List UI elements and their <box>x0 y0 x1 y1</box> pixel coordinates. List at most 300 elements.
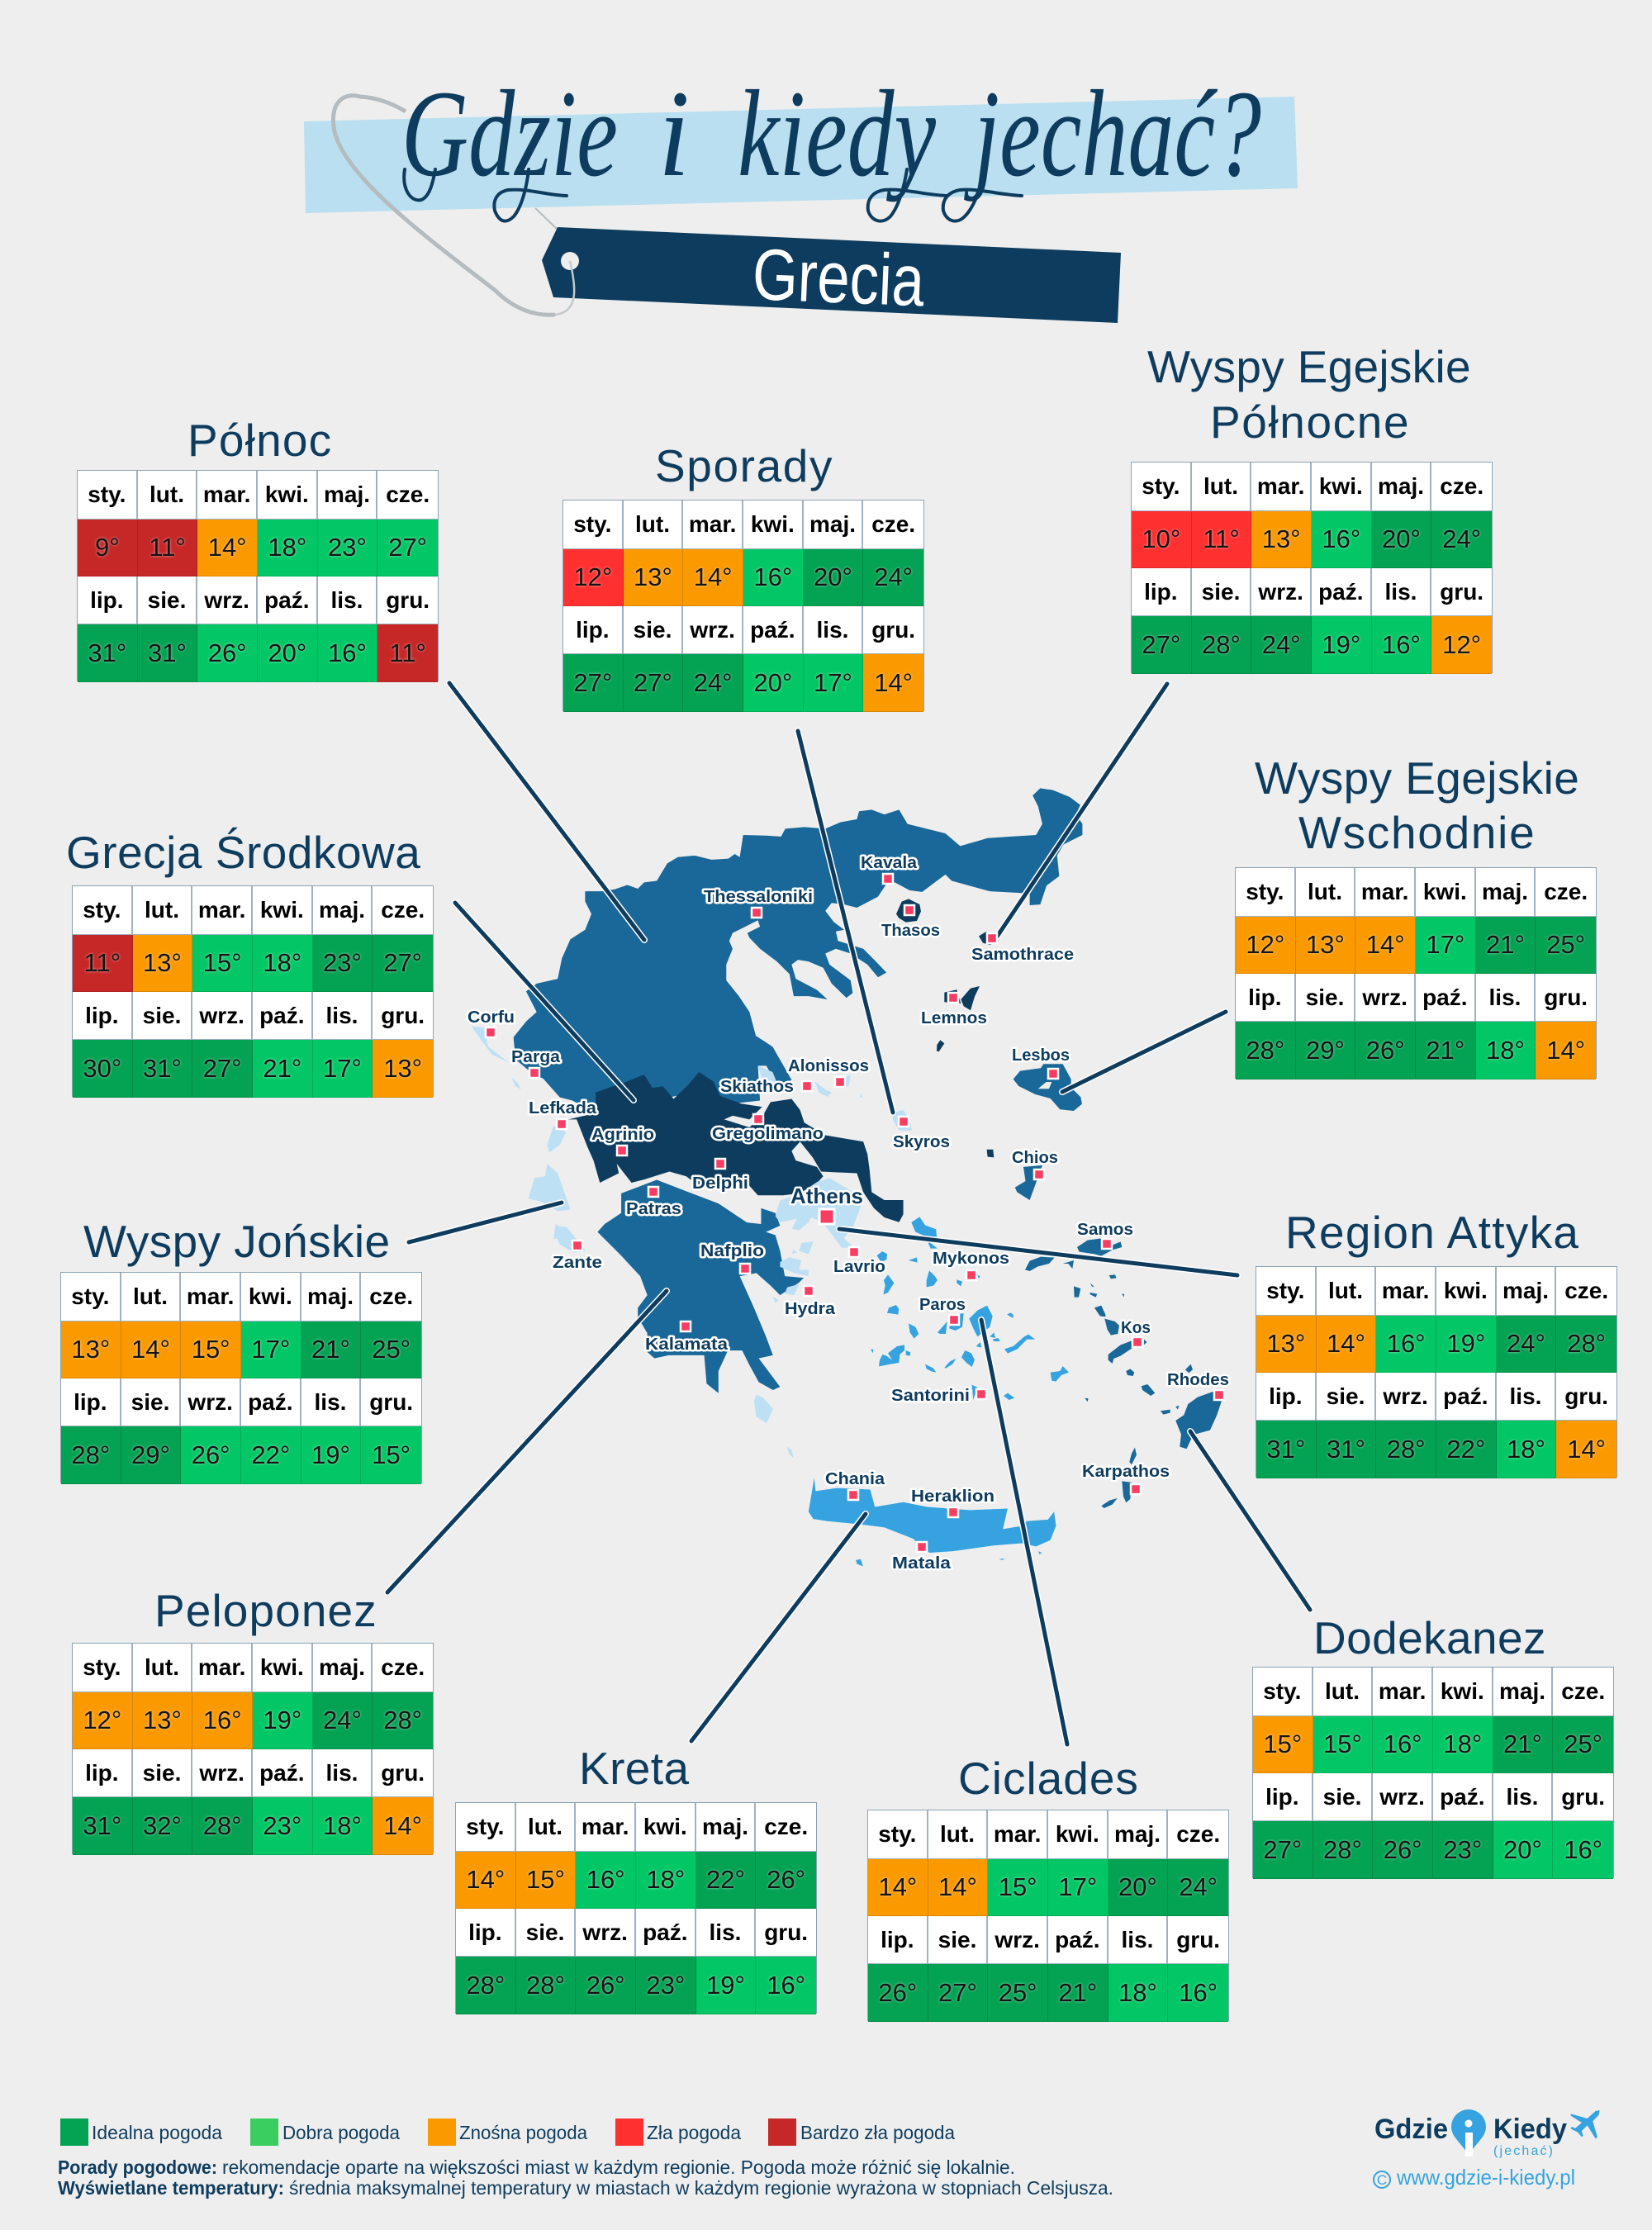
table: Wyspy Jońskie: 26° <box>192 1440 230 1468</box>
islands: Chios <box>1015 1165 1042 1200</box>
legend item: very bad weather <box>768 2118 955 2146</box>
table: Grecja Środkowa: 23° <box>323 948 362 977</box>
city: Gregolimano <box>712 1114 824 1143</box>
city: Chania <box>825 1470 885 1500</box>
title: Gdzie <box>401 65 618 202</box>
table: Region Attyka: lut. <box>1328 1278 1363 1303</box>
table: Ciclades: 18° <box>1118 1977 1157 2007</box>
islands: Dodecanese and Samos <box>1025 1238 1222 1508</box>
table: Region Attyka: maj. <box>1502 1278 1549 1303</box>
table: Grecja Środkowa: mar. <box>198 897 245 923</box>
panel: Wyspy Egejskie Wschodnie <box>1235 752 1597 1079</box>
table: Grecja Środkowa: 13° <box>383 1054 422 1082</box>
table: Wyspy Egejskie Wschodnie: lis. <box>1489 985 1521 1009</box>
map of Greece <box>472 788 1222 1566</box>
logo: Kiedy <box>1493 2114 1567 2145</box>
table: Peloponez: 32° <box>143 1810 182 1840</box>
city: Agrinio <box>591 1126 654 1155</box>
table: Sporady: 17° <box>814 667 852 697</box>
table: Wyspy Egejskie Północne: 24° <box>1262 629 1301 659</box>
city: Karpathos: Karpathos <box>1082 1463 1170 1481</box>
table: Wyspy Egejskie Wschodnie: sty. <box>1246 879 1284 904</box>
title <box>401 65 1261 202</box>
city: Samothrace: Samothrace <box>971 946 1074 964</box>
table: Wyspy Egejskie Północne: cze. <box>1440 473 1483 499</box>
city: Skyros: Skyros <box>893 1133 950 1151</box>
table: Peloponez: 14° <box>383 1810 422 1840</box>
table: Wyspy Egejskie Północne: paź. <box>1318 578 1364 605</box>
city: Delphi: Delphi <box>692 1174 748 1193</box>
heading: Wyspy Jońskie: Wyspy Jońskie <box>83 1216 390 1267</box>
table: Wyspy Jońskie: cze. <box>369 1283 413 1309</box>
city: Chios <box>1012 1149 1058 1179</box>
islands: Cyclades <box>871 1217 1069 1400</box>
legend item: bad weather: Zła pogoda <box>647 2122 741 2143</box>
table: Dodekanez: gru. <box>1561 1784 1605 1809</box>
table: Dodekanez: 21° <box>1503 1729 1542 1758</box>
table: Kreta: sie. <box>526 1919 564 1944</box>
table: Północ: lip. <box>90 586 124 613</box>
table: Grecja Środkowa <box>72 885 434 1097</box>
table: Wyspy Egejskie Północne: maj. <box>1378 473 1424 499</box>
table: Wyspy Egejskie Północne: 10° <box>1142 524 1180 553</box>
table: Ciclades: 16° <box>1179 1977 1218 2007</box>
table: Wyspy Egejskie Północne: wrz. <box>1258 578 1303 605</box>
table: Wyspy Egejskie Wschodnie: 14° <box>1366 930 1405 959</box>
table: Peloponez: sie. <box>143 1759 181 1786</box>
city: Kos <box>1121 1319 1151 1347</box>
icon: airplane <box>1571 2110 1600 2138</box>
panel: Dodekanez <box>1252 1612 1614 1879</box>
city: Heraklion <box>911 1487 995 1517</box>
table: Grecja Środkowa: 27° <box>383 948 422 977</box>
table: Północ: 18° <box>268 533 306 562</box>
table: Grecja Środkowa: 11° <box>84 948 121 977</box>
table: Peloponez: 16° <box>203 1706 242 1734</box>
table: Region Attyka: 13° <box>1266 1329 1305 1358</box>
table: Region Attyka: wrz. <box>1383 1383 1428 1409</box>
table: Ciclades: 17° <box>1058 1872 1097 1901</box>
legend item: bad weather <box>615 2118 741 2146</box>
city: Athens: Athens <box>790 1184 863 1208</box>
table: Kreta: maj. <box>702 1814 748 1839</box>
city: Patras <box>626 1187 681 1218</box>
table: Północ <box>77 470 439 681</box>
table: Peloponez: 28° <box>203 1810 242 1840</box>
table: Grecja Środkowa: paź. <box>259 1003 305 1027</box>
table: Ciclades: sty. <box>878 1821 916 1847</box>
table: Ciclades: 20° <box>1118 1872 1157 1901</box>
table: Wyspy Jońskie: paź. <box>248 1389 293 1414</box>
table: Wyspy Egejskie Wschodnie: kwi. <box>1423 879 1467 904</box>
table: Grecja Środkowa: wrz. <box>199 1003 244 1027</box>
city: Mykonos <box>933 1250 1009 1280</box>
table: Wyspy Egejskie Wschodnie: 14° <box>1546 1036 1585 1064</box>
legend item: ideal weather: Idealna pogoda <box>92 2122 222 2143</box>
table: Ciclades: 14° <box>878 1872 917 1901</box>
table: Grecja Środkowa: maj. <box>319 897 365 923</box>
city: Lesbos <box>1012 1046 1070 1079</box>
city: Nafplio <box>700 1242 764 1274</box>
logo <box>1374 2109 1600 2190</box>
table: Kreta: gru. <box>764 1919 808 1944</box>
table: Dodekanez: sty. <box>1263 1678 1301 1704</box>
table: Północ: lut. <box>150 482 184 507</box>
table: Północ: gru. <box>386 586 430 613</box>
table: Peloponez: kwi. <box>260 1654 304 1680</box>
table: Dodekanez: wrz. <box>1379 1784 1425 1809</box>
table: Kreta: kwi. <box>643 1814 687 1839</box>
heading: Sporady: Sporady <box>655 440 833 491</box>
heading line 1: Wyspy Egejskie <box>1147 341 1471 392</box>
heading: Region Attyka: Region Attyka <box>1285 1207 1579 1258</box>
table: Dodekanez: 15° <box>1323 1729 1362 1758</box>
table: Grecja Środkowa: lut. <box>145 897 179 923</box>
table: Grecja Środkowa: cze. <box>381 897 425 923</box>
table: Sporady: 27° <box>573 667 612 697</box>
table: Północ: 23° <box>328 533 367 562</box>
table: Peloponez: 24° <box>323 1706 362 1734</box>
heading line 2: Północne <box>1210 396 1410 448</box>
table: Peloponez: 31° <box>83 1810 121 1840</box>
city: Matala: Matala <box>892 1554 952 1573</box>
table: Północ: kwi. <box>265 482 309 507</box>
table: Wyspy Egejskie Północne: lut. <box>1203 473 1238 499</box>
table: Wyspy Jońskie: 21° <box>311 1335 350 1364</box>
table: Ciclades: lis. <box>1122 1926 1153 1952</box>
table: Północ: sie. <box>148 586 186 613</box>
table: Peloponez: 13° <box>143 1706 182 1734</box>
table: Wyspy Jońskie: mar. <box>187 1283 234 1309</box>
table: Peloponez: sty. <box>83 1654 121 1680</box>
city: Paros <box>919 1296 966 1325</box>
table: Wyspy Jońskie: lis. <box>315 1389 346 1414</box>
city: Kalamata: Kalamata <box>645 1336 729 1354</box>
table: Peloponez: paź. <box>259 1759 305 1786</box>
table: Kreta: 14° <box>466 1865 505 1894</box>
title banner <box>304 96 1298 323</box>
table: Wyspy Egejskie Północne: sie. <box>1202 578 1240 605</box>
city: Hydra <box>785 1286 836 1318</box>
city: Lemnos: Lemnos <box>921 1009 987 1027</box>
table: Ciclades: 26° <box>878 1977 917 2007</box>
city: Samos <box>1077 1221 1133 1249</box>
table: Wyspy Egejskie Północne: gru. <box>1440 578 1483 605</box>
table: Ciclades: 14° <box>938 1872 977 1901</box>
table: Wyspy Egejskie Wschodnie: 26° <box>1366 1036 1405 1064</box>
legend item: tolerable weather: Znośna pogoda <box>459 2122 587 2143</box>
city: Chios: Chios <box>1012 1149 1058 1167</box>
table: Wyspy Jońskie: 29° <box>131 1440 170 1468</box>
table: Kreta: 26° <box>767 1865 805 1894</box>
table: Kreta: 28° <box>466 1971 505 1999</box>
table: Peloponez: gru. <box>381 1759 425 1786</box>
table: Dodekanez: 16° <box>1564 1835 1602 1863</box>
table: Północ: 11° <box>149 533 186 562</box>
table: Peloponez: 18° <box>323 1810 362 1840</box>
table: Wyspy Egejskie Wschodnie: 21° <box>1486 930 1525 959</box>
table: Sporady: wrz. <box>690 616 735 643</box>
city: Zante: Zante <box>553 1254 602 1272</box>
table: Sporady: sty. <box>573 511 611 537</box>
table: Sporady: maj. <box>809 511 856 537</box>
table: Grecja Środkowa: 15° <box>203 948 242 977</box>
table: Północ: mar. <box>203 482 250 507</box>
panel: Wyspy Jońskie <box>60 1216 422 1484</box>
panel: Peloponez <box>72 1585 434 1855</box>
city: Thasos: Thasos <box>881 922 940 940</box>
table: Wyspy Jońskie: sty. <box>71 1283 109 1309</box>
table: Dodekanez: cze. <box>1561 1678 1605 1704</box>
website: www.gdzie-i-kiedy.pl <box>1396 2165 1575 2190</box>
table: Sporady: 20° <box>753 667 792 697</box>
table: Dodekanez: 16° <box>1384 1729 1422 1758</box>
table: Region Attyka: 31° <box>1327 1434 1365 1464</box>
logo: Gdzie <box>1374 2114 1448 2145</box>
table: Dodekanez: kwi. <box>1441 1678 1484 1704</box>
table: Grecja Środkowa: 18° <box>263 948 301 977</box>
table: Grecja Środkowa: gru. <box>381 1003 425 1027</box>
table: Dodekanez: 27° <box>1263 1835 1302 1863</box>
city: Agrinio: Agrinio <box>591 1126 654 1144</box>
website: C <box>1377 2172 1387 2188</box>
table: Wyspy Egejskie Wschodnie: 25° <box>1546 930 1585 959</box>
city: Thessaloniki <box>704 888 813 918</box>
city: Lavrio: Lavrio <box>833 1258 885 1276</box>
table: Region Attyka: 24° <box>1507 1329 1545 1358</box>
heading: Kreta: Kreta <box>579 1743 689 1794</box>
table: Kreta: sty. <box>466 1814 504 1839</box>
city labels <box>468 854 1229 1573</box>
table: Wyspy Jońskie: 15° <box>372 1440 411 1468</box>
table: Dodekanez: paź. <box>1440 1784 1485 1809</box>
table: Ciclades: sie. <box>938 1926 976 1952</box>
leader lines <box>387 683 1310 1744</box>
table: Ciclades: maj. <box>1114 1821 1161 1847</box>
city: Gregolimano: Gregolimano <box>712 1125 824 1143</box>
table: Dodekanez: lip. <box>1265 1784 1299 1809</box>
table: Ciclades: 24° <box>1179 1872 1218 1901</box>
table: Dodekanez: 28° <box>1323 1835 1362 1863</box>
table: Wyspy Egejskie Północne: kwi. <box>1319 473 1363 499</box>
table: Region Attyka: 14° <box>1327 1329 1365 1358</box>
table: Region Attyka: cze. <box>1564 1278 1608 1303</box>
table: Wyspy Jońskie: 19° <box>311 1440 350 1468</box>
table: Region Attyka: 22° <box>1446 1434 1485 1464</box>
subtitle: Grecia: Grecia <box>751 233 926 321</box>
table: Wyspy Egejskie Wschodnie: mar. <box>1361 879 1408 904</box>
city: Thessaloniki: Thessaloniki <box>704 888 813 906</box>
city: Lefkada: Lefkada <box>529 1099 597 1117</box>
legend item: good weather: Dobra pogoda <box>282 2122 400 2143</box>
table: Grecja Środkowa: sty. <box>83 897 121 923</box>
city: Samos: Samos <box>1077 1221 1133 1239</box>
table: Wyspy Egejskie Północne: mar. <box>1257 473 1304 499</box>
panel: Region Attyka <box>1256 1207 1617 1478</box>
region: Attica and Ionian islands <box>555 1179 861 1458</box>
table: Wyspy Egejskie Wschodnie: 29° <box>1306 1036 1345 1064</box>
table: Wyspy Egejskie Północne: 24° <box>1442 524 1481 553</box>
table: Północ: paź. <box>264 586 310 613</box>
table: Region Attyka: gru. <box>1564 1383 1608 1409</box>
logo: (jechać) <box>1493 2144 1553 2158</box>
table: Dodekanez: 25° <box>1564 1729 1602 1758</box>
city: Kavala <box>861 854 918 884</box>
table: Ciclades: 21° <box>1058 1977 1097 2007</box>
table: Wyspy Egejskie Północne <box>1131 462 1493 673</box>
table: Wyspy Jońskie: 22° <box>251 1440 290 1468</box>
table: Peloponez: lis. <box>326 1759 358 1786</box>
table: Wyspy Egejskie Wschodnie: wrz. <box>1362 985 1408 1009</box>
title: kiedy <box>738 65 936 202</box>
table: Północ: wrz. <box>204 586 249 613</box>
table: Dodekanez: lut. <box>1325 1678 1360 1704</box>
table: Północ: 16° <box>328 638 367 667</box>
table: Wyspy Egejskie Północne: 20° <box>1382 524 1421 553</box>
table: Wyspy Egejskie Wschodnie: 13° <box>1306 930 1345 959</box>
city: Karpathos <box>1082 1463 1170 1494</box>
table: Wyspy Egejskie Wschodnie: lip. <box>1248 985 1282 1009</box>
city: Kos: Kos <box>1121 1319 1151 1337</box>
heading line 2: Wschodnie <box>1298 807 1536 858</box>
table: Wyspy Egejskie Północne: 12° <box>1442 629 1481 659</box>
city: Parga <box>511 1048 561 1078</box>
table: Region Attyka: 18° <box>1507 1434 1545 1464</box>
table: Wyspy Jońskie: maj. <box>307 1283 354 1309</box>
table: Peloponez: cze. <box>381 1654 425 1680</box>
table: Region Attyka: 28° <box>1387 1434 1426 1464</box>
table: Peloponez: 23° <box>263 1810 301 1840</box>
table: Dodekanez: mar. <box>1379 1678 1426 1704</box>
table: Kreta: mar. <box>582 1814 629 1839</box>
table: Sporady: 16° <box>753 562 792 591</box>
city: Rhodes: Rhodes <box>1167 1371 1229 1389</box>
table: Wyspy Egejskie Północne: lip. <box>1144 578 1178 605</box>
table: Ciclades: gru. <box>1176 1926 1220 1952</box>
title: i <box>658 65 690 202</box>
table: Sporady: gru. <box>871 616 915 643</box>
table: Północ: 20° <box>268 638 306 667</box>
table: Wyspy Egejskie Wschodnie: lut. <box>1308 879 1342 904</box>
table: Wyspy Jońskie: wrz. <box>188 1389 233 1414</box>
table: Sporady: lis. <box>817 616 848 643</box>
panel: Grecja Środkowa <box>66 827 434 1098</box>
table: Region Attyka: sie. <box>1327 1383 1365 1409</box>
table: Wyspy Egejskie Północne: 11° <box>1203 524 1240 553</box>
table: Grecja Środkowa: lip. <box>85 1003 119 1027</box>
city: Paros: Paros <box>919 1296 966 1314</box>
city: Samothrace <box>971 933 1074 964</box>
table: Kreta: 16° <box>767 1971 805 1999</box>
table: Region Attyka: 31° <box>1266 1434 1305 1464</box>
footnotes: średnia maksymalnej temperatury w miastach w każdym regionie wyrażona w stopniach Celsjusza. <box>289 2177 1113 2199</box>
table: Region Attyka: 28° <box>1567 1329 1606 1358</box>
footnotes <box>58 2156 1113 2199</box>
table: Wyspy Jońskie: lip. <box>74 1389 107 1414</box>
footnotes: rekomendacje oparte na większości miast w każdym regionie. Pogoda może różnić się lokalnie. <box>222 2156 1015 2178</box>
city: Hydra: Hydra <box>785 1300 836 1318</box>
table: Region Attyka: 16° <box>1387 1329 1426 1358</box>
table: Wyspy Jońskie: 28° <box>71 1440 110 1468</box>
city: Alonissos <box>788 1057 869 1087</box>
table: Wyspy Egejskie Wschodnie: paź. <box>1422 985 1468 1009</box>
table: Wyspy Egejskie Północne: 13° <box>1262 524 1301 553</box>
table: Ciclades: 25° <box>999 1977 1037 2007</box>
table: Ciclades: 15° <box>999 1872 1037 1901</box>
city: Nafplio: Nafplio <box>700 1242 764 1260</box>
table: Region Attyka: lip. <box>1269 1383 1303 1409</box>
table: Dodekanez: lis. <box>1507 1784 1538 1809</box>
title: jechać? <box>963 65 1261 202</box>
table: Kreta: 23° <box>646 1971 685 1999</box>
city: Alonissos: Alonissos <box>788 1057 869 1075</box>
city: Lesbos: Lesbos <box>1012 1046 1070 1065</box>
panel: Północ <box>77 415 439 682</box>
table: Region Attyka: 19° <box>1446 1329 1485 1358</box>
table: Kreta <box>455 1802 817 2014</box>
table: Kreta: lip. <box>468 1919 502 1944</box>
table: Ciclades: 27° <box>938 1977 977 2007</box>
heading: Peloponez: Peloponez <box>154 1585 377 1636</box>
city: Matala <box>892 1542 952 1573</box>
table: Północ: 11° <box>389 638 426 667</box>
table: Północ: maj. <box>324 482 370 507</box>
table: Grecja Środkowa: 30° <box>83 1054 121 1082</box>
table: Ciclades: cze. <box>1176 1821 1220 1847</box>
table: Sporady: lut. <box>635 511 670 537</box>
table: Grecja Środkowa: 31° <box>143 1054 182 1082</box>
table: Wyspy Egejskie Północne: 28° <box>1202 629 1241 659</box>
footnotes: Porady pogodowe: <box>58 2156 217 2178</box>
icon: map pin <box>1451 2109 1486 2156</box>
legend item: ideal weather <box>60 2118 222 2146</box>
table: Peloponez: wrz. <box>199 1759 244 1786</box>
table: Sporady: 14° <box>694 562 733 591</box>
table: Kreta: lis. <box>710 1919 741 1944</box>
city: Skiathos: Skiathos <box>720 1078 794 1096</box>
table: Region Attyka: lis. <box>1510 1383 1541 1409</box>
table: Grecja Środkowa: kwi. <box>260 897 304 923</box>
table: Peloponez: maj. <box>319 1654 365 1680</box>
table: Wyspy Egejskie Wschodnie <box>1235 867 1597 1079</box>
table: Peloponez: 19° <box>263 1706 301 1734</box>
city: Lemnos <box>921 993 987 1027</box>
table: Wyspy Egejskie Północne: 16° <box>1382 629 1421 659</box>
heading: Dodekanez: Dodekanez <box>1313 1612 1546 1663</box>
city: Lefkada <box>529 1099 597 1129</box>
region: north mainland <box>514 788 1082 1113</box>
table: Ciclades: kwi. <box>1056 1821 1099 1847</box>
table: Dodekanez: 26° <box>1384 1835 1422 1863</box>
table: Ciclades: lip. <box>881 1926 914 1952</box>
table: Kreta: lut. <box>528 1814 563 1839</box>
panel: Wyspy Egejskie Północne <box>1131 341 1493 674</box>
city: Kavala: Kavala <box>861 854 918 872</box>
table: Kreta: 22° <box>706 1865 745 1894</box>
table: Dodekanez: 15° <box>1263 1729 1302 1758</box>
table: Wyspy Egejskie Wschodnie: 21° <box>1426 1036 1464 1064</box>
city: Parga: Parga <box>511 1048 561 1066</box>
table: Dodekanez: maj. <box>1499 1678 1545 1704</box>
table: Północ: 9° <box>95 533 120 562</box>
legend <box>60 2118 955 2146</box>
table: Sporady: 14° <box>874 667 913 697</box>
heading: Grecja Środkowa: Grecja Środkowa <box>66 827 420 878</box>
table: Grecja Środkowa: 27° <box>203 1054 242 1082</box>
table: Peloponez: lut. <box>145 1654 179 1680</box>
table: Wyspy Jońskie: sie. <box>131 1389 169 1414</box>
table: Grecja Środkowa: 21° <box>263 1054 301 1082</box>
